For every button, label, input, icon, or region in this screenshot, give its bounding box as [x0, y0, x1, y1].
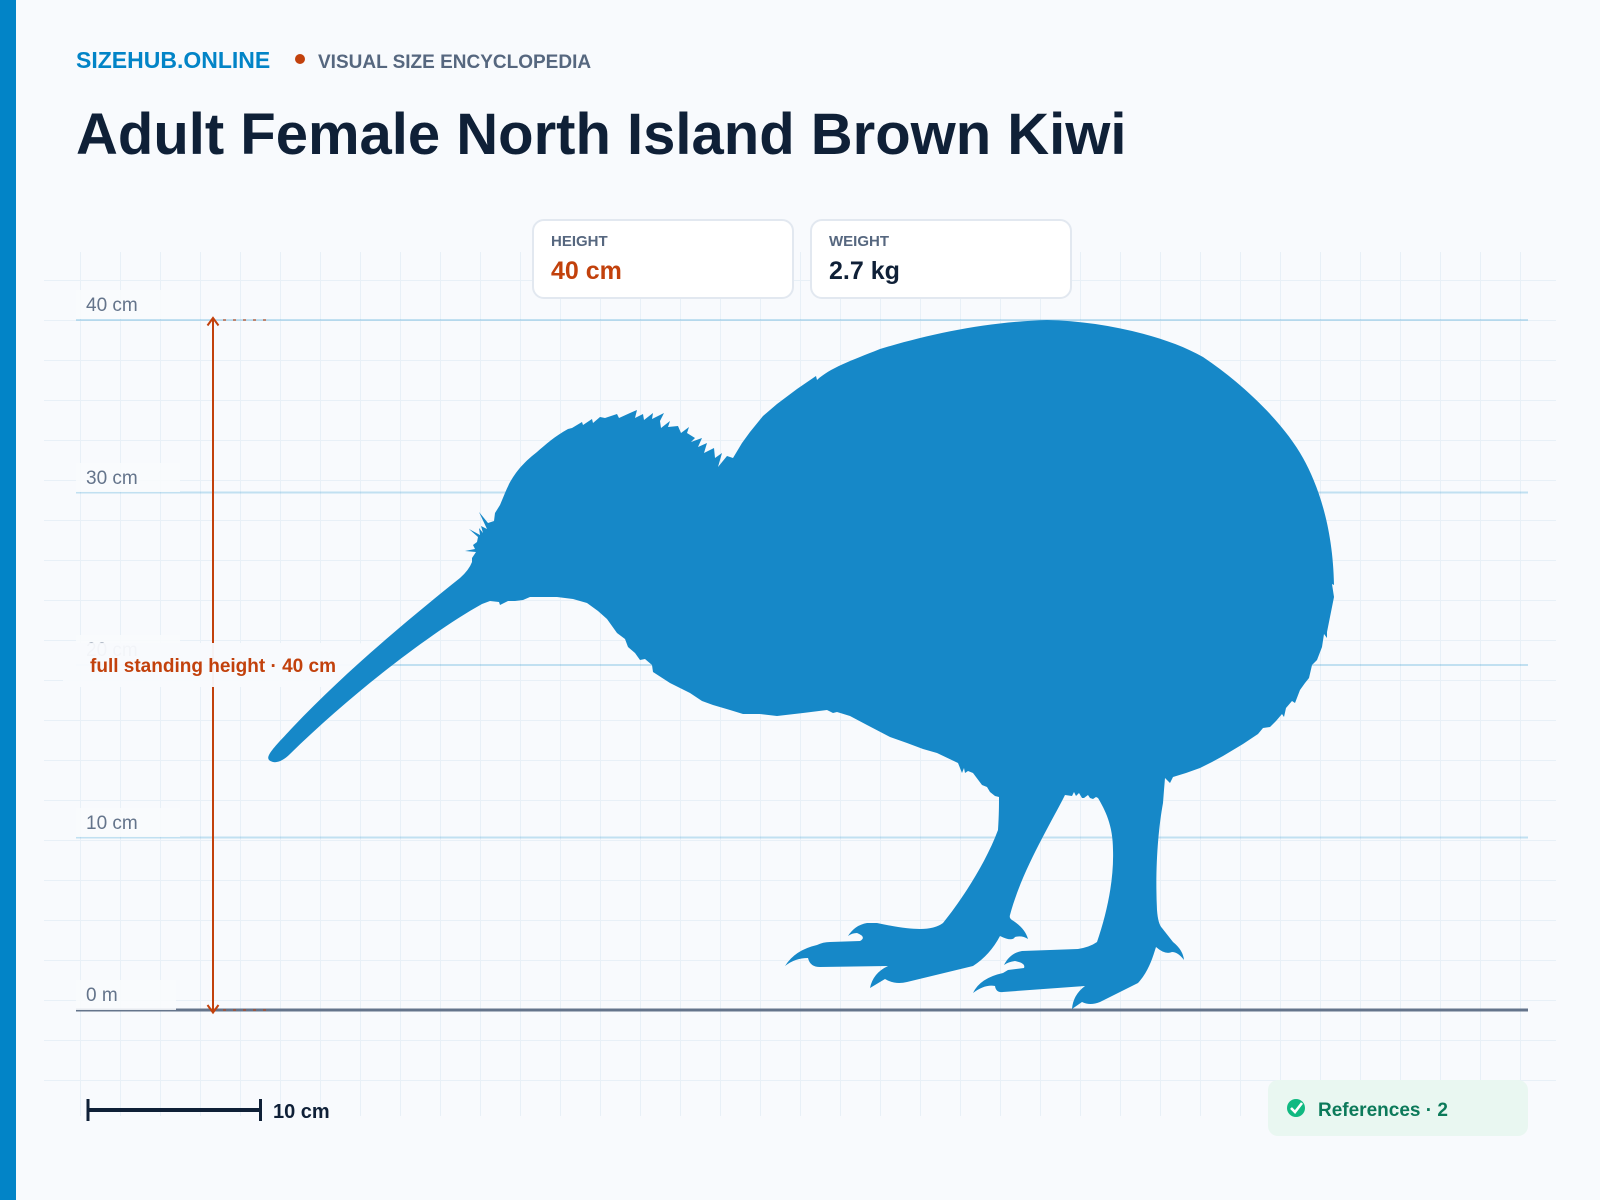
tick label: 0 m	[76, 980, 176, 1010]
title: Adult Female North Island Brown Kiwi	[76, 102, 1127, 167]
references text: References · 2	[1318, 1100, 1448, 1121]
brand dot	[295, 54, 305, 64]
tick label: 40 cm	[76, 290, 180, 319]
height callout label	[63, 643, 363, 687]
gridline: 40 cm	[76, 319, 1528, 321]
header: brand line	[76, 47, 591, 73]
arrow shaft	[212, 318, 214, 1012]
tick label: 30 cm	[76, 463, 180, 492]
tick label: 10 cm	[76, 808, 180, 837]
tick label: 10 cm: 10 cm	[86, 813, 138, 834]
brand name: SIZEHUB.ONLINE	[76, 47, 270, 73]
tick label: 0 m: 0 m	[86, 985, 118, 1006]
background measurement grid	[44, 252, 1556, 1116]
gridline: 20 cm	[76, 664, 1528, 666]
top dashed guide	[223, 319, 267, 321]
tick label: 20 cm	[76, 635, 180, 664]
tick label: 40 cm: 40 cm	[86, 295, 138, 316]
height scale axis	[76, 290, 1528, 1010]
arrow head bottom	[208, 1005, 218, 1012]
tick label: 20 cm: 20 cm	[86, 640, 138, 661]
height callout label: full standing height · 40 cm	[90, 656, 336, 677]
height label: HEIGHT	[551, 233, 608, 250]
gridline: 10 cm	[76, 836, 1528, 838]
arrow head top	[208, 318, 218, 326]
tick label: 30 cm: 30 cm	[86, 468, 138, 489]
icon: check circle	[1287, 1099, 1305, 1117]
stat card: height	[533, 220, 793, 298]
weight value: 2.7 kg	[829, 257, 900, 285]
ground line	[76, 1008, 1528, 1012]
weight label: WEIGHT	[829, 233, 889, 250]
height value: 40 cm	[551, 257, 622, 285]
left accent bar	[0, 0, 16, 1200]
stat card: weight	[811, 220, 1071, 298]
references badge	[1268, 1080, 1528, 1136]
bottom dashed guide	[223, 1009, 267, 1011]
height dimension arrow	[208, 318, 267, 1012]
tagline: VISUAL SIZE ENCYCLOPEDIA	[318, 52, 591, 73]
scale bar: 10 cm: 10 cm	[273, 1101, 330, 1123]
kiwi silhouette	[268, 320, 1334, 1009]
scale bar: 10 cm	[88, 1099, 330, 1123]
gridline: 30 cm	[76, 492, 1528, 494]
